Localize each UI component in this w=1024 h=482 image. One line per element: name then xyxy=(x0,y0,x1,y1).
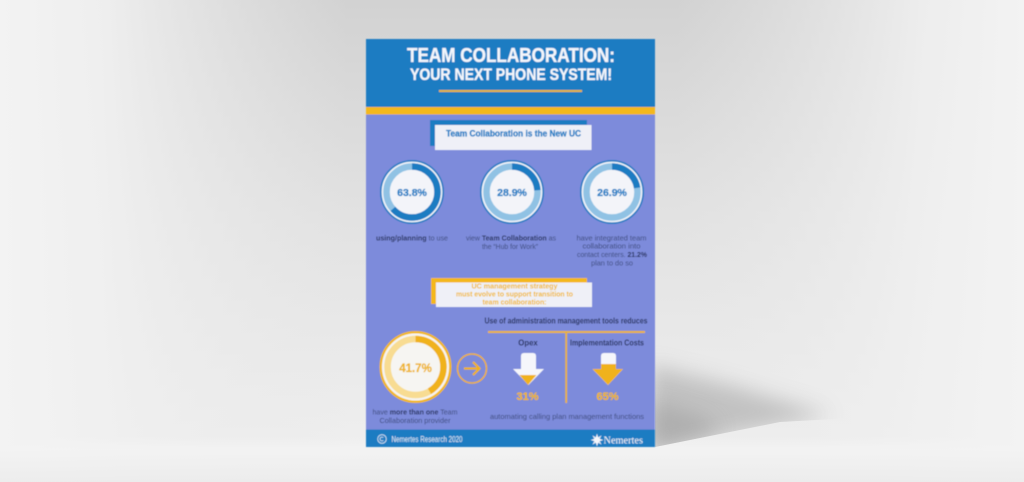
label: Opex: Opex xyxy=(518,338,538,348)
donut: 28.9% xyxy=(481,161,543,223)
section heading: new UC xyxy=(430,120,592,150)
label: hub for work xyxy=(466,234,556,251)
yellow band xyxy=(366,107,655,114)
label: more than one provider: Collaboration provider xyxy=(380,416,451,425)
title: TEAM COLLABORATION: xyxy=(407,45,615,67)
donut: 63.8%: 63.8% xyxy=(397,187,428,199)
section heading: UC management strategy xyxy=(431,278,592,307)
donut: 41.7% xyxy=(381,332,450,402)
donut: 63.8% xyxy=(381,161,443,223)
label: contact centers: contact centers. 21.2% xyxy=(577,250,647,259)
section heading: UC management strategy: team collaboration: xyxy=(482,298,546,306)
icon: arrow in circle xyxy=(458,354,486,383)
stat: 31%: 31% xyxy=(516,391,539,403)
studio background xyxy=(179,0,852,447)
donut: 26.9% xyxy=(581,161,643,223)
label: more than one provider: have more than one Team xyxy=(372,408,458,416)
label: contact centers: collaboration into xyxy=(582,242,640,250)
icon: logo star xyxy=(590,434,604,446)
icon: down arrow 65% xyxy=(592,353,623,385)
poster background xyxy=(366,114,655,430)
section heading: UC management strategy: must evolve to support transition to xyxy=(456,290,573,298)
header band xyxy=(366,39,655,107)
donut: 41.7%: 41.7% xyxy=(399,363,432,375)
poster xyxy=(366,39,655,447)
footer band xyxy=(366,430,655,447)
heading: administration tools: Use of administration management tools reduces xyxy=(484,316,648,326)
label: contact centers xyxy=(576,234,647,268)
label: more than one provider xyxy=(372,408,458,425)
logo wordmark: Nemertes xyxy=(604,436,643,446)
label: hub for work: the “Hub for Work” xyxy=(482,242,538,251)
donut: 26.9%: 26.9% xyxy=(597,187,628,199)
label: using/planning: using/planning to use xyxy=(376,234,448,242)
stat: 65%: 65% xyxy=(596,391,619,403)
section heading: UC management strategy: UC management strategy xyxy=(472,282,558,290)
footer credit: Nemertes Research 2020 xyxy=(392,435,463,444)
label: automating calling plan: automating calling plan management functions xyxy=(490,412,644,421)
title: YOUR NEXT PHONE SYSTEM! xyxy=(410,66,612,84)
icon: copyright xyxy=(378,435,386,443)
label: Implementation Costs: Implementation Costs xyxy=(570,338,645,348)
title xyxy=(407,45,615,84)
label: hub for work: view Team Collaboration as xyxy=(466,234,556,242)
label: contact centers: have integrated team xyxy=(576,234,646,242)
label: contact centers: plan to do so xyxy=(591,258,633,268)
icon: down arrow 31% xyxy=(513,353,544,385)
section heading: new UC: Team Collaboration is the New UC xyxy=(446,128,581,138)
donut: 28.9%: 28.9% xyxy=(497,187,528,199)
